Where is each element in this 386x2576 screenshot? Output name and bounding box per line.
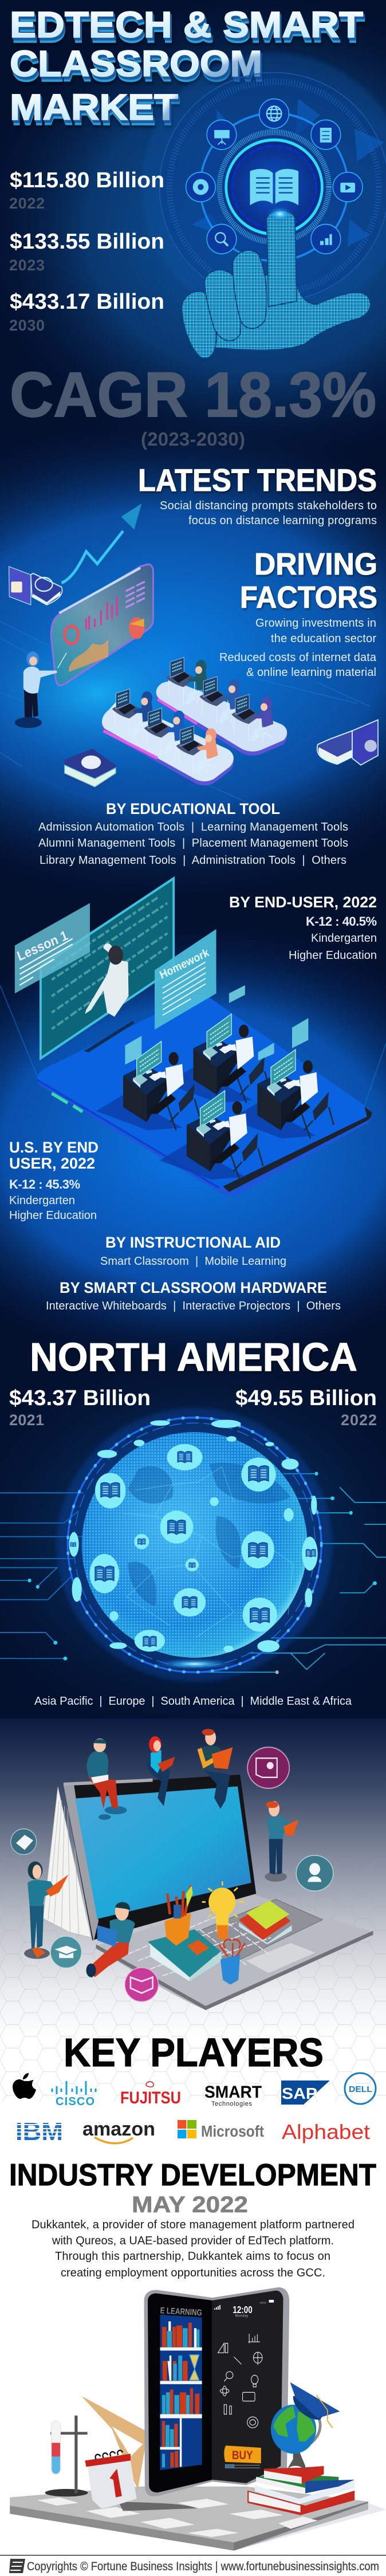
page background dark [0, 0, 386, 1724]
segment: by educational tool [38, 800, 348, 867]
stat: 2030 value [9, 290, 164, 334]
stat: north america 2022 [235, 1386, 377, 1429]
platform: front row [102, 689, 234, 785]
tablet device [37, 994, 372, 1196]
stat: 2030 value: $433.17 Billion [10, 290, 164, 314]
sphere with dotted map [82, 1432, 308, 1670]
segment: by instructional aid: BY INSTRUCTIONAL AID [105, 1234, 281, 1251]
student sitting top left [86, 1739, 127, 1820]
icons on phone [218, 2334, 262, 2428]
icon: Fortune Business Insights [9, 2559, 25, 2573]
title: CLASSROOM [10, 43, 262, 84]
phone illustration [10, 2287, 386, 2551]
CAGR headline: (2023-2030) [141, 428, 245, 450]
stat: 2023 value: 2023 [9, 257, 45, 274]
student with orange top [199, 1729, 233, 1809]
buy button: BUY [232, 2449, 253, 2462]
background glow: hero [0, 0, 386, 470]
books stack [247, 2466, 355, 2515]
panel: lesson 1 [15, 903, 90, 993]
student standing right [265, 1801, 298, 1882]
logo: SMART Technologies: SMART [204, 2083, 262, 2102]
logo: Fujitsu [120, 2082, 181, 2107]
segment: U.S. by end user 2022: K-12 : 45.3% [9, 1177, 80, 1191]
background glow: tablet [0, 917, 386, 1375]
stat: 2022 value: $115.80 Billion [10, 168, 164, 192]
stat: north america 2021: 2021 [9, 1411, 44, 1429]
segment: by smart classroom hardware: Interactive Whiteboards | Interactive Projectors | Others [46, 1300, 341, 1312]
heading: driving factors: DRIVING [254, 547, 377, 581]
stat: north america 2022: $49.55 Billion [235, 1386, 377, 1410]
circuit lines [0, 1474, 386, 1672]
stat: 2023 value [9, 230, 164, 274]
stat: 2022 value [9, 168, 164, 212]
graduation cap [290, 2382, 340, 2428]
text: development body: creating employment opportunities across the GCC. [61, 2267, 325, 2279]
bubble icons [11, 1747, 333, 2001]
text: phone clock: 100% [260, 2301, 266, 2304]
title [10, 4, 363, 128]
heading: key players: KEY PLAYERS [64, 2030, 324, 2075]
logo: Dell: DELL [349, 2085, 372, 2094]
segment: U.S. by end user 2022 [9, 1139, 99, 1222]
text: driving factors body: & online learning material [246, 666, 376, 679]
student with red hair [147, 1736, 175, 1806]
logo: Apple [13, 2073, 36, 2099]
stat: north america 2022: 2022 [341, 1411, 377, 1429]
teacher figure [15, 651, 66, 728]
text: latest trends body: focus on distance learning programs [188, 514, 377, 527]
icon: central book disc [226, 140, 322, 234]
heading: north america: NORTH AMERICA [30, 1335, 357, 1379]
whiteboard [41, 878, 174, 1059]
arrow: rising trend [62, 504, 141, 583]
laptop illustration with students [0, 1729, 386, 2102]
panel: lesson 1: Lesson 1 [15, 927, 70, 964]
segment: by smart classroom hardware [46, 1279, 341, 1312]
segment: by instructional aid [100, 1234, 286, 1268]
logo: Alphabet: Alphabet [282, 2120, 370, 2144]
segment: by educational tool: Alumni Management Tools | Placement Management Tools [38, 837, 348, 850]
student standing left [24, 1862, 69, 1959]
background fade to white [0, 1718, 386, 2039]
tablet classroom illustration [0, 878, 386, 1196]
segment: by end-user 2022: BY END-USER, 2022 [229, 894, 377, 911]
stat: 2023 value: $133.55 Billion [10, 230, 164, 254]
logo: Amazon: amazon [82, 2118, 155, 2140]
platform: back row [156, 658, 287, 756]
segment: by end-user 2022: Higher Education [289, 949, 377, 962]
text: development body: Through this partnership, Dukkantek aims to focus on [55, 2250, 330, 2263]
checkered floor [10, 2487, 386, 2551]
segment: by educational tool: BY EDUCATIONAL TOOL [106, 800, 280, 817]
segment: by instructional aid: Smart Classroom | Mobile Learning [100, 1255, 286, 1268]
logos: key players [13, 2073, 376, 2146]
teacher at board [85, 943, 128, 1017]
stat: 2022 value: 2022 [9, 195, 45, 212]
segment: U.S. by end user 2022: Higher Education [9, 1209, 97, 1222]
segment: by end-user 2022: K-12 : 40.5% [306, 914, 377, 929]
title: EDTECH & SMART [10, 4, 363, 45]
CAGR headline: CAGR 18.3% [10, 360, 376, 430]
text: driving factors body: Growing investments in [255, 617, 376, 630]
background glow: globe [0, 1323, 386, 1759]
student seated front [86, 1902, 135, 1977]
logo: Microsoft [178, 2120, 264, 2140]
hero illustration: hand touching digital ring [141, 53, 386, 358]
network ring [57, 1408, 333, 1682]
panel: homework [155, 929, 216, 1029]
text: driving factors body: Reduced costs of internet data [219, 651, 377, 664]
segment: by end-user 2022: Kindergarten [311, 932, 377, 945]
background glow: under dashboard [0, 607, 246, 779]
stat: 2030 value: 2030 [9, 317, 45, 334]
book pages behind laptop [43, 1787, 91, 1937]
text: driving factors body: the education sector [271, 632, 376, 645]
classroom illustration [0, 504, 378, 813]
globe illustration [0, 1408, 386, 1682]
text: e-learning label: E LEARNING [160, 2306, 202, 2318]
test tube stand [45, 2416, 88, 2496]
students at desks [96, 985, 334, 1179]
segment: U.S. by end user 2022: U.S. BY END [9, 1139, 99, 1156]
segment: U.S. by end user 2022: Kindergarten [9, 1194, 75, 1207]
text: latest trends body [160, 500, 377, 527]
icon: wireframe hand [182, 206, 371, 358]
triangle rulers [81, 2396, 148, 2490]
laptop lid and screen [64, 1775, 256, 1942]
logo: Dell [345, 2073, 376, 2104]
bookshelf on phone [160, 2315, 202, 2470]
logo: IBM: IBM [15, 2118, 63, 2146]
heading: driving factors [240, 547, 377, 615]
icon ring: seven circular icons [186, 99, 363, 254]
logo: SMART Technologies: Technologies [211, 2101, 252, 2107]
desk items: books, pencil cup, bulb [148, 1881, 292, 1985]
logo: Cisco: CISCO [56, 2095, 94, 2108]
segment: by end-user 2022 [229, 894, 377, 962]
logo: Cisco [52, 2081, 96, 2108]
folded phone [144, 2287, 289, 2496]
text: latest trends body: Social distancing prompts stakeholders to [160, 500, 377, 512]
text: phone clock [214, 2300, 274, 2318]
icon: book with people [317, 720, 378, 765]
text: date: MAY 2022 [132, 2192, 248, 2217]
stat: north america 2021 [9, 1386, 151, 1429]
background glow: classroom [0, 412, 386, 905]
white lower background [0, 2039, 386, 2576]
segment: by smart classroom hardware: BY SMART CLASSROOM HARDWARE [60, 1279, 327, 1296]
logo: Microsoft: Microsoft [201, 2122, 264, 2140]
logo: SAP [281, 2081, 330, 2105]
text: driving factors body [219, 617, 377, 679]
desk globe [271, 2405, 320, 2469]
logo: SAP: SAP [282, 2085, 317, 2102]
stat: north america 2021: $43.37 Billion [9, 1386, 151, 1410]
text: phone clock: 12:00 [233, 2305, 253, 2315]
segment: by educational tool: Library Management Tools | Administration Tools | Others [40, 854, 346, 867]
buy button [224, 2445, 261, 2468]
dashboard screen [51, 564, 153, 686]
text: phone clock: Monday [235, 2314, 248, 2318]
text: development body [31, 2219, 355, 2279]
calendar [85, 2451, 137, 2508]
text: development body: with Qureos, a UAE-based provider of EdTech platform. [52, 2235, 334, 2247]
title: MARKET [10, 86, 178, 128]
footer rule [0, 2555, 386, 2556]
text: development body: Dukkantek, a provider of store management platform partnered [31, 2219, 355, 2231]
icon: book with briefcase [9, 567, 62, 605]
logo: Fujitsu: FUJITSU [120, 2089, 181, 2107]
segment: by educational tool: Admission Automation Tools | Learning Management Tools [38, 821, 348, 833]
icon: book with question mark [65, 749, 116, 788]
panel: homework: Homework [158, 946, 211, 982]
heading: driving factors: FACTORS [240, 580, 377, 615]
segment: U.S. by end user 2022: USER, 2022 [9, 1155, 95, 1172]
book nodes [69, 1419, 318, 1652]
text: other regions: Asia Pacific | Europe | South America | Middle East & Africa [34, 1695, 352, 1708]
laptop base [96, 1894, 373, 2010]
